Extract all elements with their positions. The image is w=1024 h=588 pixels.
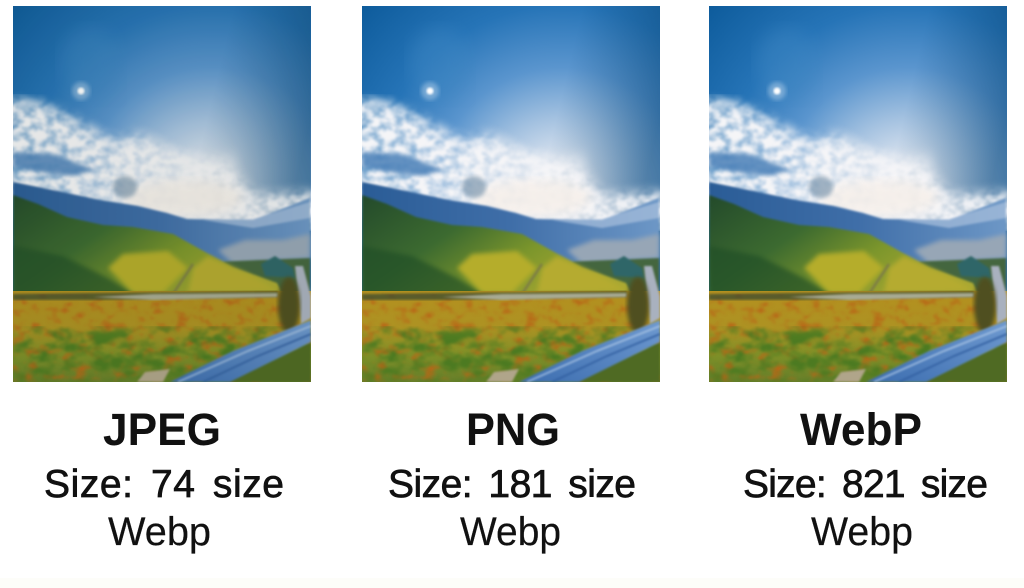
heading: JPEG: JPEG [103,404,221,455]
text: PNG format: Webp [460,510,561,554]
text: JPEG format: Webp [108,510,211,554]
background fade at bottom edge [0,578,1024,588]
image: JPEG landscape [0,6,343,382]
panel: JPEG [0,6,343,554]
image: PNG landscape [342,6,692,382]
text: PNG size: Size: 181 size [388,463,636,506]
panel: PNG [342,6,692,554]
heading: WebP: WebP [800,404,922,455]
text: WebP size: Size: 821 size [743,463,988,506]
text: JPEG size: Size: 74 size [44,463,284,506]
image: WebP landscape [689,6,1024,382]
text: WebP format: Webp [811,510,913,554]
panel: WebP [689,6,1024,554]
heading: PNG: PNG [466,404,560,455]
